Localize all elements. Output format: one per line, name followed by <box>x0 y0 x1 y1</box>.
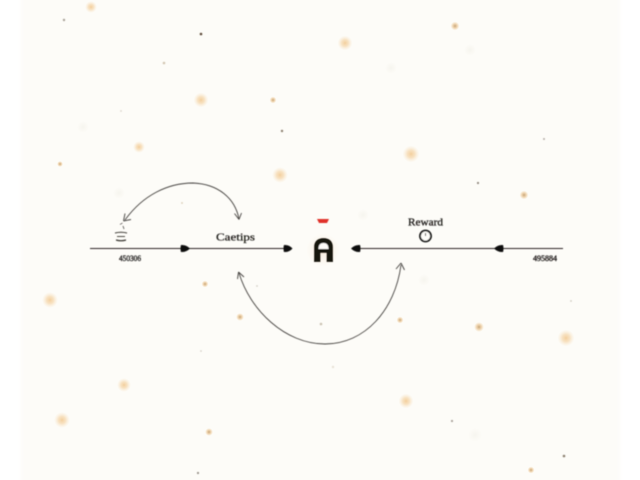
label: Caetips: Caetips <box>216 232 255 244</box>
left arrow line with markers <box>90 245 292 252</box>
right arrow line with markers <box>351 245 563 252</box>
icon: central black arch figure <box>306 233 340 267</box>
icon: red cap <box>317 219 329 223</box>
label: Reward: Reward <box>408 216 444 228</box>
icon: small stack at left <box>115 223 127 241</box>
left value label: 450306 <box>119 253 141 263</box>
top curved arrow <box>124 183 242 221</box>
bottom curved arrow <box>238 263 404 344</box>
icon: clock <box>420 230 431 242</box>
right value label: 495884 <box>533 253 558 263</box>
